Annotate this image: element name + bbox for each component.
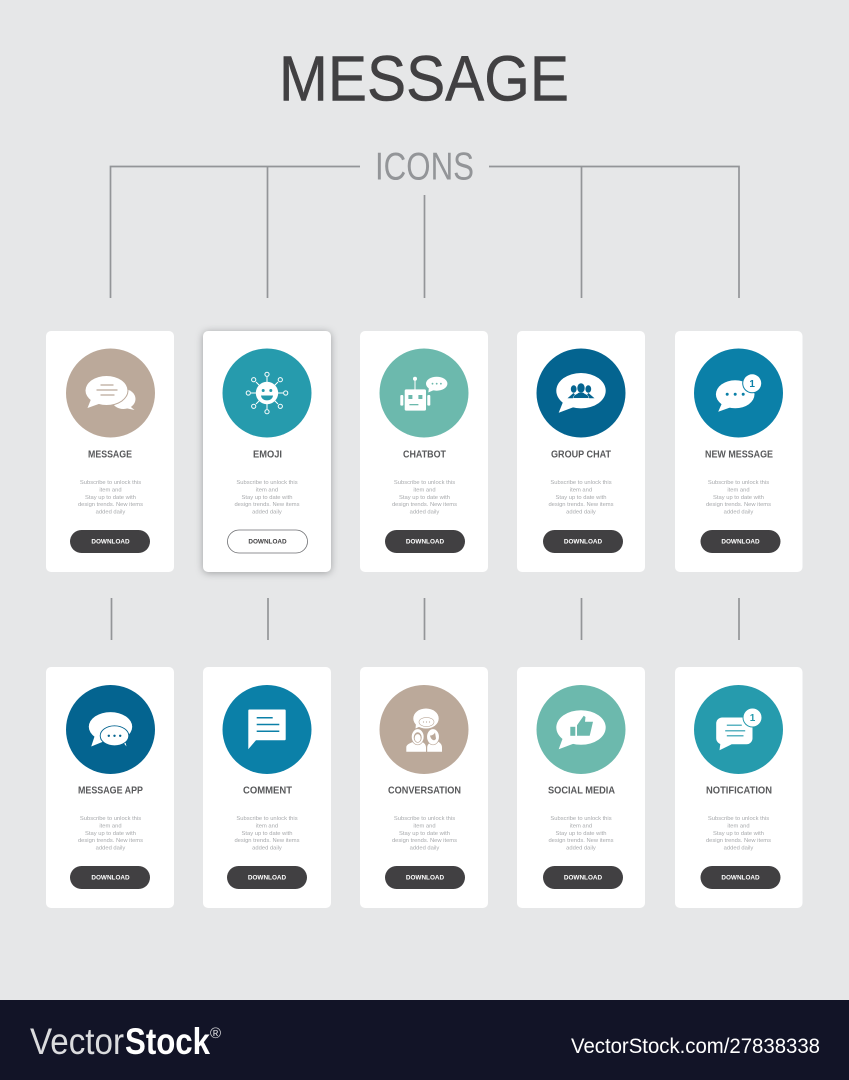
panel: social media [517, 667, 645, 908]
text block: emoji: Stay up to date with [242, 495, 292, 501]
button: download: DOWNLOAD [406, 538, 445, 546]
text block: message app: design trends. New items [78, 838, 143, 844]
panel: new message [675, 331, 802, 572]
text block: chatbot: added daily [410, 510, 439, 516]
text block: new message: Subscribe to unlock this [708, 480, 769, 486]
heading: chatbot: CHATBOT [403, 450, 446, 460]
button: download [385, 530, 465, 553]
panel: emoji (highlighted) [203, 331, 331, 573]
text block: message: Subscribe to unlock this [80, 480, 141, 486]
text block: comment: Stay up to date with [242, 831, 292, 837]
text block: new message: item and [727, 487, 750, 493]
text block: notification: added daily [724, 846, 753, 852]
text block: emoji: added daily [252, 510, 282, 516]
text block: emoji: design trends. New items [234, 502, 300, 508]
watermark logo: Vector [30, 1021, 124, 1062]
icon: chatbot [380, 348, 468, 438]
button: download: DOWNLOAD [721, 874, 760, 882]
heading: message app: MESSAGE APP [78, 786, 143, 796]
panel: group chat [517, 331, 645, 572]
icon: emoji network [222, 348, 312, 438]
text block: message: design trends. New items [78, 502, 143, 508]
text block: message app: Stay up to date with [85, 831, 136, 837]
text block: emoji: item and [256, 487, 278, 493]
text block: message: added daily [96, 510, 125, 516]
text block: chatbot: design trends. New items [392, 502, 457, 508]
heading: message: MESSAGE [88, 450, 132, 460]
subtitle: icons: ICONS [375, 146, 474, 188]
button: download: DOWNLOAD [564, 538, 603, 546]
text block: social media: Stay up to date with [556, 831, 606, 837]
text block: group chat: added daily [566, 510, 596, 516]
text block: message app: item and [99, 823, 122, 829]
text block: conversation: Subscribe to unlock this [394, 816, 455, 822]
button: download: DOWNLOAD [91, 874, 130, 882]
text block: group chat: Subscribe to unlock this [550, 480, 612, 486]
icon: comment [222, 685, 312, 774]
text block: message: item and [99, 487, 122, 493]
text block: comment: design trends. New items [234, 838, 300, 844]
icon: social media [536, 685, 626, 774]
text block: conversation: added daily [410, 846, 439, 852]
watermark logo [30, 1021, 221, 1062]
button: download: DOWNLOAD [91, 538, 130, 546]
heading: notification: NOTIFICATION [706, 786, 772, 796]
text block: chatbot: item and [413, 487, 436, 493]
text block: comment: added daily [252, 846, 282, 852]
text block: group chat: Stay up to date with [556, 495, 606, 501]
text block: new message: Stay up to date with [713, 495, 764, 501]
icon: notification: 1 [750, 713, 756, 724]
panel: message app [46, 667, 174, 908]
button: download: DOWNLOAD [564, 874, 603, 882]
button: download: DOWNLOAD [721, 538, 760, 546]
text block: social media: item and [570, 823, 592, 829]
button: download: DOWNLOAD [248, 874, 287, 882]
icon: notification [694, 685, 783, 774]
button: download [700, 530, 780, 553]
text block: conversation: Stay up to date with [399, 831, 450, 837]
text block: new message: added daily [724, 510, 753, 516]
text block: message app: added daily [96, 846, 125, 852]
icon: new message: 1 [749, 379, 755, 390]
watermark id: VectorStock.com/27838338 [571, 1035, 820, 1058]
connector lines from subtitle to top row [110, 166, 739, 298]
connector lines between rows [112, 598, 739, 640]
text block: comment: Subscribe to unlock this [236, 816, 298, 822]
button: download [543, 530, 623, 553]
icon: conversation [380, 685, 468, 774]
text block: message app: Subscribe to unlock this [80, 816, 141, 822]
button: download [385, 866, 465, 889]
footer band [0, 1000, 849, 1080]
title: MESSAGE [279, 42, 569, 114]
text block: new message: design trends. New items [706, 502, 771, 508]
heading: comment: COMMENT [243, 786, 292, 796]
watermark logo: ® [210, 1025, 221, 1042]
watermark logo: Stock [125, 1021, 210, 1062]
panel: message [46, 331, 174, 572]
text block: social media: design trends. New items [548, 838, 614, 844]
button: download: DOWNLOAD [406, 874, 445, 882]
heading: group chat: GROUP CHAT [551, 450, 611, 460]
button: download [227, 866, 307, 889]
button: download [700, 866, 780, 889]
button: download [70, 866, 150, 889]
text block: notification: Stay up to date with [713, 831, 764, 837]
text block: message: Stay up to date with [85, 495, 136, 501]
heading: new message: NEW MESSAGE [705, 450, 773, 460]
heading: conversation: CONVERSATION [388, 786, 461, 796]
text block: group chat: design trends. New items [548, 502, 614, 508]
text block: conversation: design trends. New items [392, 838, 457, 844]
icon: new message [694, 348, 783, 438]
text block: conversation: item and [413, 823, 436, 829]
button: download outlined: DOWNLOAD [248, 538, 287, 546]
button: download [543, 866, 623, 889]
text block: notification: item and [727, 823, 750, 829]
icon: group chat [536, 348, 626, 438]
icon: message bubbles [66, 348, 155, 438]
text block: social media: Subscribe to unlock this [550, 816, 612, 822]
icon: message app [66, 685, 155, 774]
panel: conversation [360, 667, 488, 908]
panel: chatbot [360, 331, 488, 572]
heading: emoji: EMOJI [253, 450, 282, 460]
text block: social media: added daily [566, 846, 596, 852]
button: download outlined [228, 530, 308, 553]
text block: comment: item and [256, 823, 278, 829]
button: download [70, 530, 150, 553]
text block: chatbot: Subscribe to unlock this [394, 480, 455, 486]
text block: emoji: Subscribe to unlock this [236, 480, 298, 486]
text block: group chat: item and [570, 487, 592, 493]
text block: notification: design trends. New items [706, 838, 771, 844]
text block: chatbot: Stay up to date with [399, 495, 450, 501]
panel: notification [675, 667, 802, 908]
heading: social media: SOCIAL MEDIA [548, 786, 615, 796]
text block: notification: Subscribe to unlock this [708, 816, 769, 822]
panel: comment [203, 667, 331, 908]
